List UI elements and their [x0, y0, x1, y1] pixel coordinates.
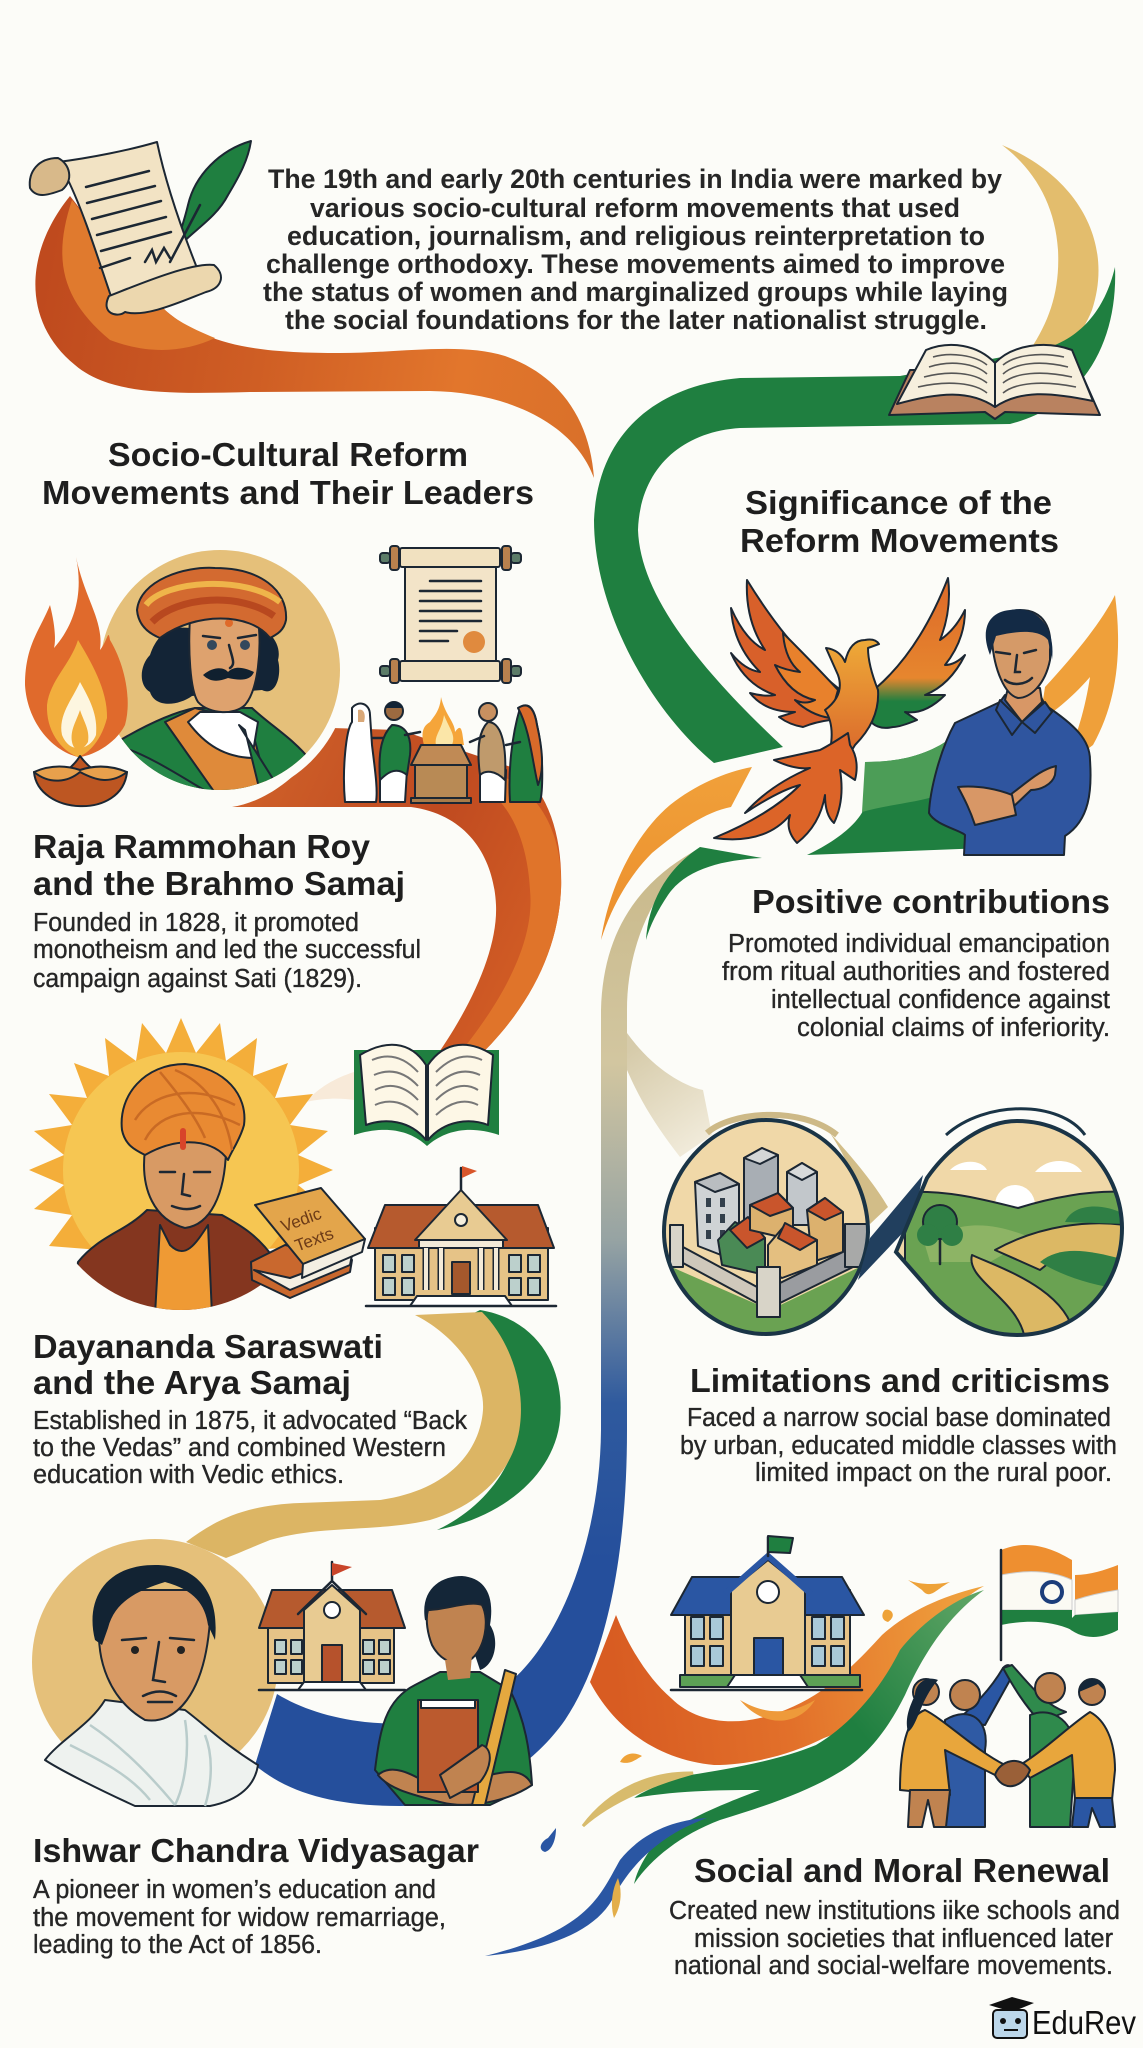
heading: Significance of the Reform Movements: Significance of the: [745, 485, 1052, 522]
ribbon: tan branch to city: [627, 1033, 712, 1157]
text block: Limitations and criticisms: by urban, educated middle classes with: [680, 1432, 1117, 1460]
ribbon: green under phoenix: [646, 735, 985, 940]
portrait: Dayananda Saraswati with sun: [29, 1018, 333, 1315]
icon: Indian flag: [1001, 1545, 1118, 1660]
text block: Social and Moral Renewal: Social and Moral Renewal: [694, 1853, 1110, 1890]
phoenix: tail: [714, 733, 857, 843]
text block: Dayananda Saraswati: to the Vedas” and combined Western: [33, 1434, 446, 1462]
ribbon: red orange left: [232, 728, 561, 1065]
text block: Positive contributions: colonial claims of inferiority.: [797, 1014, 1110, 1042]
text block: Limitations and criticisms: Faced a narrow social base dominated: [687, 1404, 1111, 1432]
icon: Vedic Texts books: [251, 1188, 365, 1298]
icon: decree scroll: [380, 546, 521, 683]
illustration: rural landscape: [896, 1109, 1125, 1340]
ribbon: central tan to blue: [255, 848, 700, 1806]
phoenix: right wing: [872, 578, 965, 728]
illustration: people holding flag: [900, 1665, 1115, 1827]
text block: Ishwar Chandra Vidyasagar: the movement for widow remarriage,: [33, 1904, 446, 1932]
text block: Social and Moral Renewal: mission societies that influenced later: [694, 1925, 1113, 1953]
ribbon: green main: [594, 267, 1115, 763]
text block: Social and Moral Renewal: Created new institutions iike schools and: [669, 1897, 1120, 1925]
icon: parchment and quill: [30, 141, 251, 315]
phoenix: left wing highlight: [775, 633, 838, 718]
text block: Limitations and criticisms: [680, 1363, 1117, 1487]
icon: open book top: [889, 345, 1100, 419]
text block: Positive contributions: from ritual authorities and fostered: [722, 958, 1110, 986]
ribbon: orange top: [35, 196, 594, 478]
ribbon: orange wedge behind man: [1040, 595, 1118, 770]
text block: Raja Rammohan Roy: campaign against Sati (1829).: [33, 965, 362, 993]
text block: Dayananda Saraswati: Dayananda Saraswati: [33, 1329, 383, 1366]
ribbon: gold crescent top right: [1002, 145, 1098, 353]
intro paragraph: education, journalism, and religious reinterpretation to: [287, 221, 985, 251]
text block: Positive contributions: Promoted individual emancipation: [728, 930, 1110, 958]
text block: Raja Rammohan Roy: Raja Rammohan Roy: [33, 829, 370, 866]
icon: open book mid: [354, 1045, 499, 1146]
ribbon: faint smear near book: [306, 1072, 354, 1102]
icon: flame and diya: [25, 557, 128, 806]
icon: blue roof school: [671, 1536, 864, 1690]
ribbon: gold wisps: [583, 1580, 950, 1918]
text block: Raja Rammohan Roy: monotheism and led the successful: [33, 936, 421, 964]
portrait: Raja Rammohan Roy: [102, 550, 340, 790]
heading: Socio-Cultural Reform Movements and Their Leaders: [42, 437, 534, 512]
illustration: walled city: [662, 1118, 870, 1336]
heading: Socio-Cultural Reform Movements and Their Leaders: Movements and Their Leaders: [42, 475, 534, 512]
phoenix: body and head: [825, 640, 879, 770]
ribbon: blue swoosh: [485, 1818, 707, 1956]
icon: college building: [366, 1166, 556, 1306]
text block: Dayananda Saraswati: [33, 1329, 467, 1489]
icon: ceremony figures around fire: [344, 697, 542, 803]
text block: Raja Rammohan Roy: [33, 829, 421, 993]
ribbon: orange bowl lower right: [590, 1586, 984, 1765]
text block: Positive contributions: intellectual confidence against: [771, 986, 1110, 1014]
illustration: woman with book: [375, 1576, 532, 1805]
icon: Vedic Texts books: Texts: [292, 1224, 336, 1255]
heading: Significance of the Reform Movements: Reform Movements: [740, 523, 1059, 560]
icon: infinity link: [858, 1175, 923, 1282]
intro paragraph: the social foundations for the later nationalist struggle.: [285, 305, 987, 335]
text block: Limitations and criticisms: Limitations and criticisms: [690, 1363, 1110, 1400]
portrait: Ishwar Chandra Vidyasagar: [32, 1539, 278, 1806]
text block: Raja Rammohan Roy: Founded in 1828, it promoted: [33, 909, 359, 937]
text block: Dayananda Saraswati: Established in 1875, it advocated “Back: [33, 1407, 467, 1435]
logo: EduRev: [989, 1997, 1136, 2041]
text block: Ishwar Chandra Vidyasagar: Ishwar Chandra Vidyasagar: [33, 1833, 479, 1870]
text block: Raja Rammohan Roy: and the Brahmo Samaj: [33, 866, 405, 903]
illustration: phoenix: [714, 578, 965, 843]
heading: Socio-Cultural Reform Movements and Their Leaders: Socio-Cultural Reform: [108, 437, 468, 474]
ribbon: orange arc left of phoenix: [601, 767, 752, 940]
text block: Positive contributions: Positive contributions: [752, 884, 1110, 921]
icon: tan arc above city: [707, 1115, 888, 1224]
text block: Social and Moral Renewal: national and social-welfare movements.: [674, 1952, 1113, 1980]
intro paragraph: challenge orthodoxy. These movements aimed to improve: [266, 249, 1005, 279]
text block: Positive contributions: [722, 884, 1110, 1042]
intro paragraph: [263, 164, 1008, 335]
ribbon: gold and green mid left: [186, 1310, 561, 1558]
intro paragraph: the status of women and marginalized groups while laying: [263, 277, 1008, 307]
text block: Ishwar Chandra Vidyasagar: A pioneer in women’s education and: [33, 1876, 436, 1904]
text block: Social and Moral Renewal: [669, 1853, 1120, 1980]
text block: Dayananda Saraswati: education with Vedic ethics.: [33, 1461, 344, 1489]
illustration: man with folded arms: [929, 609, 1091, 855]
ribbon: green wisp: [634, 1590, 984, 1884]
text block: Limitations and criticisms: limited impact on the rural poor.: [755, 1459, 1112, 1487]
icon: Vedic Texts books: Vedic: [278, 1204, 324, 1236]
heading: Significance of the Reform Movements: [740, 485, 1059, 560]
text block: Dayananda Saraswati: and the Arya Samaj: [33, 1365, 351, 1402]
icon: village school: [259, 1562, 405, 1690]
phoenix: white halo: [714, 733, 857, 843]
phoenix: left wing: [731, 580, 838, 727]
text block: Ishwar Chandra Vidyasagar: [33, 1833, 479, 1959]
intro paragraph: The 19th and early 20th centuries in India were marked by: [268, 164, 1002, 194]
intro paragraph: various socio-cultural reform movements that used: [310, 193, 960, 223]
text block: Ishwar Chandra Vidyasagar: leading to the Act of 1856.: [33, 1931, 322, 1959]
